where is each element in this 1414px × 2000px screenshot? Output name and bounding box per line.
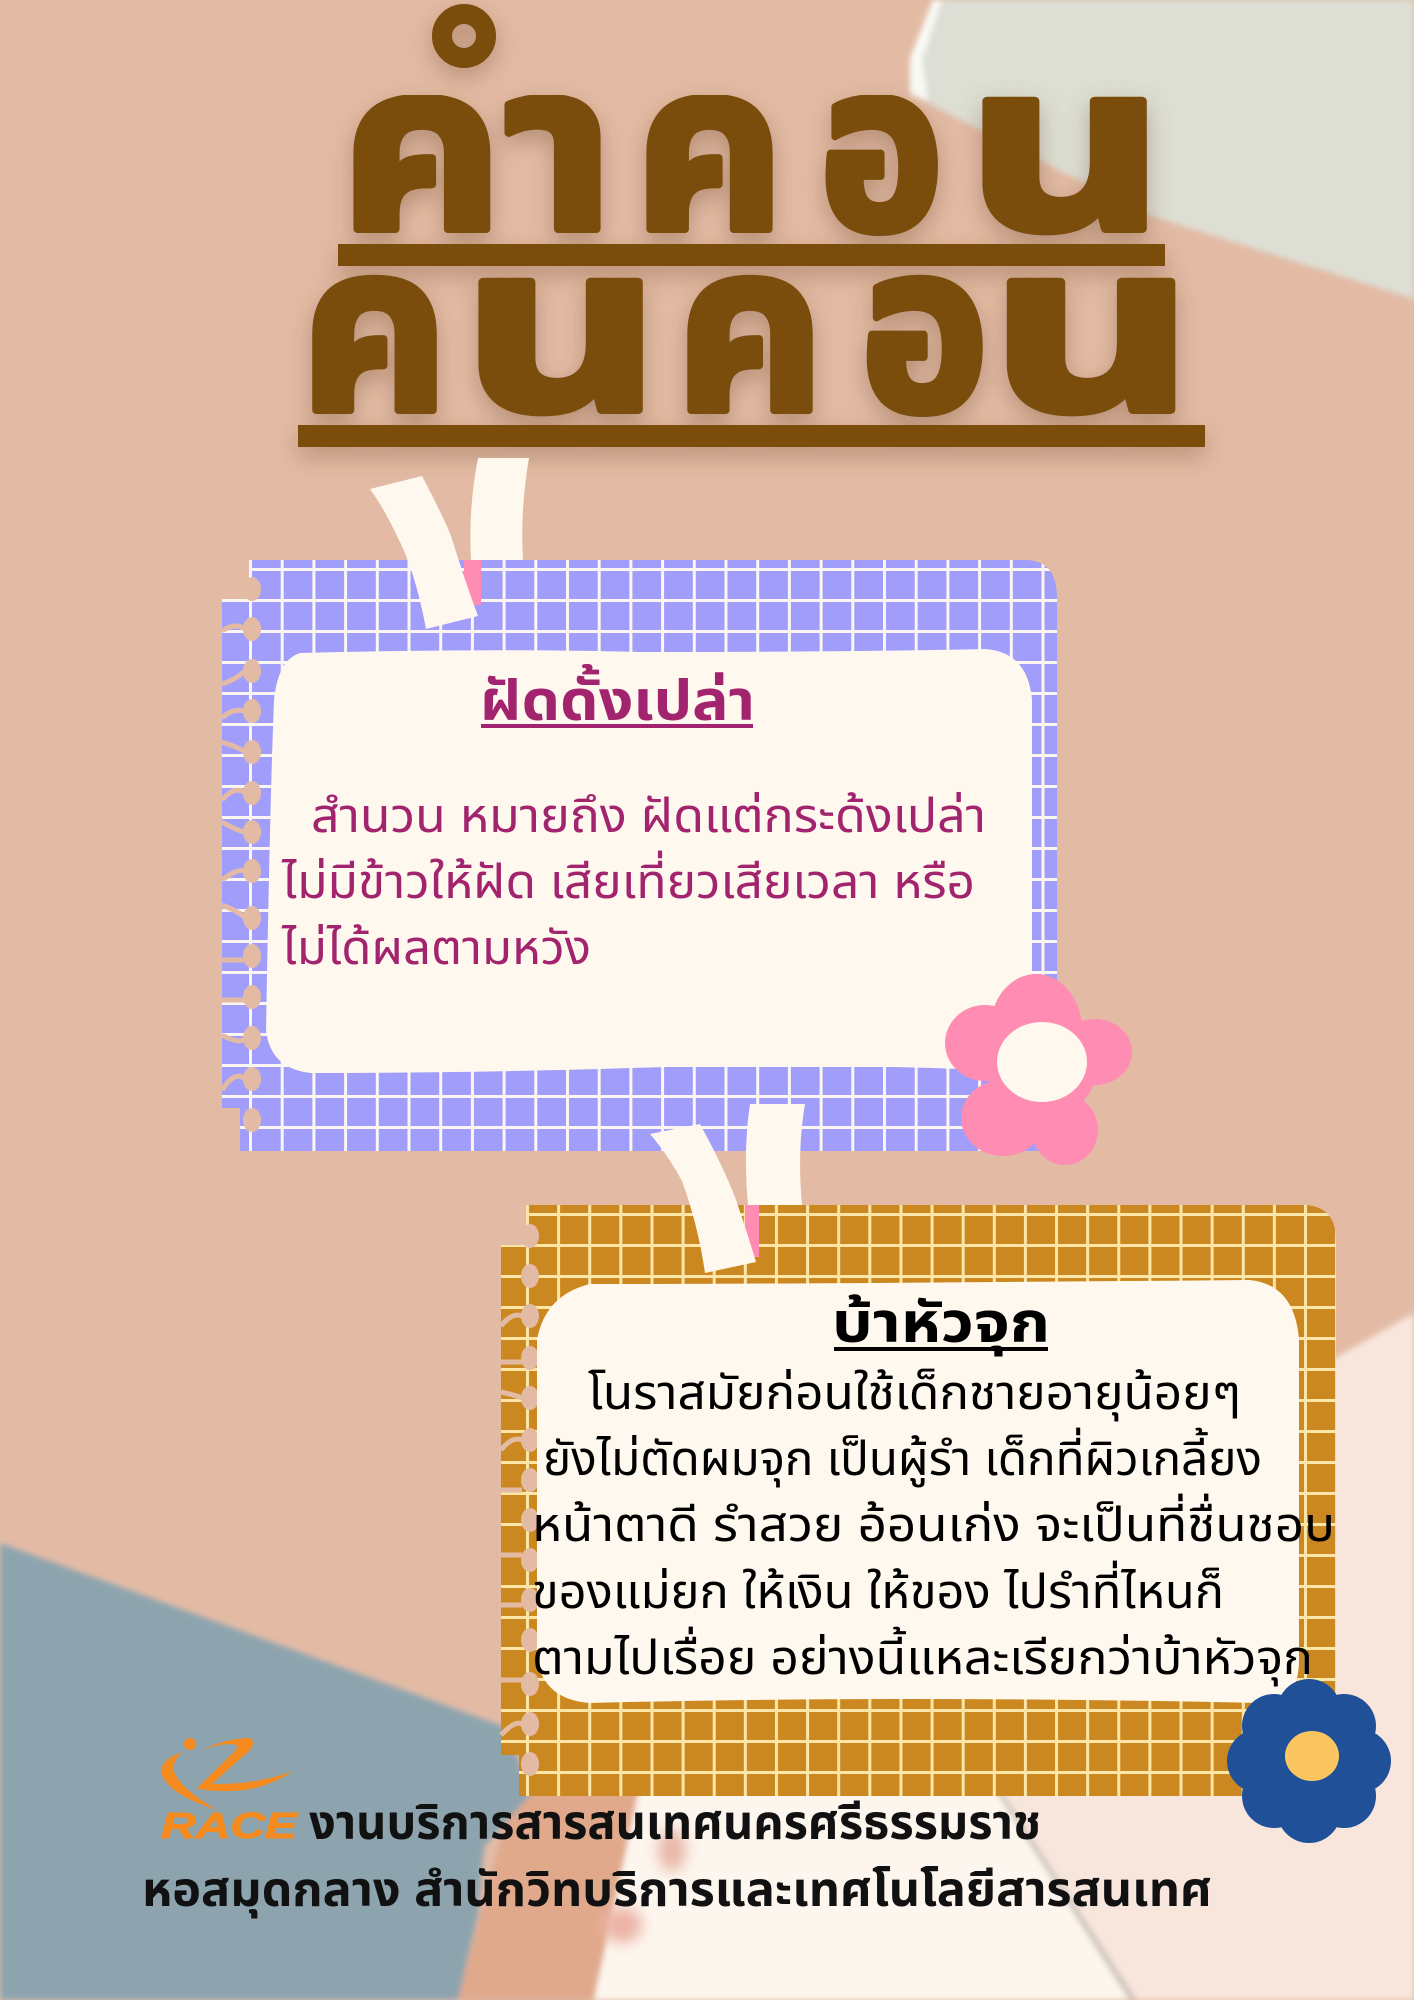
- body text: บ้าหัวจุก: ของแม่ยก ให้เงิน ให้ของ ไปรำที่ไหนก็: [532, 1560, 1224, 1618]
- body text: บ้าหัวจุก: ตามไปเรื่อย อย่างนี้แหละเรียกว่าบ้าหัวจุก: [532, 1626, 1313, 1686]
- tape tab: top card pink: [464, 560, 481, 605]
- footer text: หอสมุดกลาง สำนักวิทบริการและเทศโนโลยีสารสนเทศ: [142, 1864, 1212, 1919]
- title: line 1: [338, 14, 1166, 279]
- title: line 2: ค: [675, 198, 825, 460]
- body text: ฝัดดั้งเปล่า: ไม่ได้ผลตามหวัง: [281, 921, 591, 974]
- grid paper: bottom card: [501, 1205, 1336, 1796]
- title: line 1: ค: [634, 17, 785, 279]
- footer text: งานบริการสารสนเทศนครศรีธรรมราช: [309, 1797, 1041, 1850]
- punched holes: top card: [222, 577, 261, 1132]
- body text: บ้าหัวจุก: หน้าตาดี รำสวย อ้อนเก่ง จะเป็นที่ชื่นชอบ: [532, 1493, 1335, 1551]
- note paper: bottom card: [537, 1280, 1299, 1703]
- note paper: top card: [266, 649, 1032, 1073]
- tape strip: top card back: [470, 458, 529, 560]
- title: line 2: ค: [300, 198, 449, 460]
- punched holes: bottom card: [501, 1224, 539, 1776]
- body text: บ้าหัวจุก: ยังไม่ตัดผมจุก เป็นผู้รำ เด็กที่ผิวเกลี้ยง: [543, 1427, 1262, 1487]
- title: line 2: [298, 198, 1205, 460]
- body text: บ้าหัวจุก: [532, 1366, 1335, 1686]
- panel: บ้าหัวจุก: [501, 1104, 1391, 1843]
- tape strip: top card front: [370, 476, 478, 629]
- heading: บ้าหัวจุก: บ้าหัวจุก: [832, 1291, 1050, 1357]
- tape strip: bottom card front: [650, 1124, 756, 1273]
- icon: blue flower: [1227, 1679, 1391, 1843]
- logo: RACE: RACE: [161, 1805, 298, 1846]
- title: line 1: น: [966, 17, 1166, 279]
- body text: ฝัดดั้งเปล่า: สำนวน หมายถึง ฝัดแต่กระด้งเปล่า: [311, 789, 986, 842]
- heading: ฝัดดั้งเปล่า: ฝัดดั้งเปล่า: [480, 663, 755, 732]
- panel: ฝัดดั้งเปล่า: [222, 458, 1132, 1165]
- title: line 2: น: [990, 198, 1195, 460]
- body text: ฝัดดั้งเปล่า: [281, 789, 986, 974]
- icon: pink flower: [945, 974, 1132, 1165]
- footer text: [142, 1797, 1212, 1919]
- title: line 1: อ: [819, 17, 944, 279]
- title: line 1: คำ: [340, 17, 614, 279]
- body text: บ้าหัวจุก: โนราสมัยก่อนใช้เด็กชายอายุน้อยๆ: [588, 1366, 1241, 1421]
- grid paper: top card: [222, 560, 1057, 1151]
- logo: RACE: [161, 1738, 298, 1846]
- body text: ฝัดดั้งเปล่า: ไม่มีข้าวให้ฝัด เสียเที่ยวเสียเวลา หรือ: [281, 850, 975, 908]
- tape tab: bottom card pink: [745, 1205, 759, 1257]
- title: line 2: น: [462, 198, 662, 460]
- title: line 2: อ: [860, 198, 989, 460]
- tape strip: bottom card back: [746, 1104, 805, 1205]
